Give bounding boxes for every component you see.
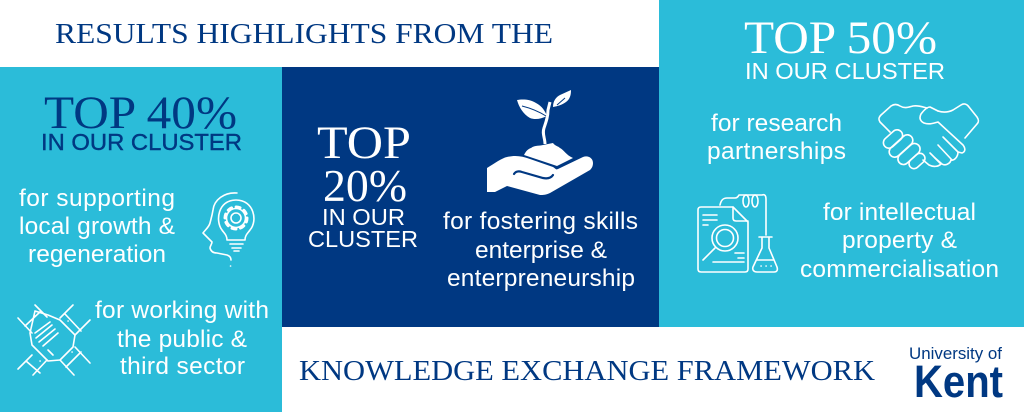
text: research partnerships — [707, 110, 846, 165]
text: local growth — [19, 185, 175, 268]
title: results highlights: RESULTS HIGHLIGHTS FROM THE — [55, 18, 553, 50]
text: local growth: regeneration — [28, 241, 166, 268]
logo: University of Kent: University of — [909, 344, 1002, 363]
text: intellectual property — [800, 199, 999, 283]
panel: right teal — [659, 0, 1024, 327]
text: public and third sector: third sector — [120, 353, 245, 380]
heading: top 20%: 20% — [323, 161, 407, 211]
subheading: in our cluster: IN OUR CLUSTER — [745, 58, 945, 84]
text: local growth: for supporting — [19, 185, 175, 212]
text: intellectual property: commercialisation — [800, 256, 999, 283]
panel: left teal — [0, 67, 282, 412]
subheading: in our cluster: IN OUR — [322, 204, 405, 230]
title: knowledge exchange framework: KNOWLEDGE EXCHANGE FRAMEWORK — [299, 355, 875, 387]
logo: University of Kent: Kent — [914, 356, 1003, 407]
subheading: in our cluster — [308, 204, 418, 252]
text: public and third sector: for working with — [95, 297, 269, 324]
heading: top 50%: TOP 50% — [744, 12, 937, 64]
text: skills and enterprise: enterprise & — [475, 237, 607, 264]
text: skills and enterprise — [443, 208, 638, 292]
text: intellectual property: property & — [842, 227, 957, 254]
subheading: in our cluster: CLUSTER — [308, 226, 418, 252]
subheading: in our cluster: IN OUR CLUSTER — [41, 129, 242, 155]
heading: top 20% — [317, 117, 411, 211]
text: research partnerships: for research — [711, 110, 842, 137]
text: local growth: local growth & — [19, 213, 175, 240]
icon: joined hands — [18, 305, 90, 375]
heading: top 40%: TOP 40% — [44, 87, 237, 139]
icon: seedling in hand — [487, 90, 593, 195]
text: intellectual property: for intellectual — [823, 199, 976, 226]
icon: document, magnifier and flask — [698, 195, 777, 272]
heading: top 20%: TOP — [317, 117, 411, 169]
text: skills and enterprise: enterpreneurship — [447, 265, 635, 292]
text: public and third sector — [95, 297, 269, 380]
text: public and third sector: the public & — [117, 326, 247, 353]
panel: navy centre — [282, 67, 659, 327]
icon: head with lightbulb — [203, 193, 254, 266]
text: skills and enterprise: for fostering skills — [443, 208, 638, 235]
icon: handshake — [879, 104, 978, 171]
text: research partnerships: partnerships — [707, 138, 846, 165]
